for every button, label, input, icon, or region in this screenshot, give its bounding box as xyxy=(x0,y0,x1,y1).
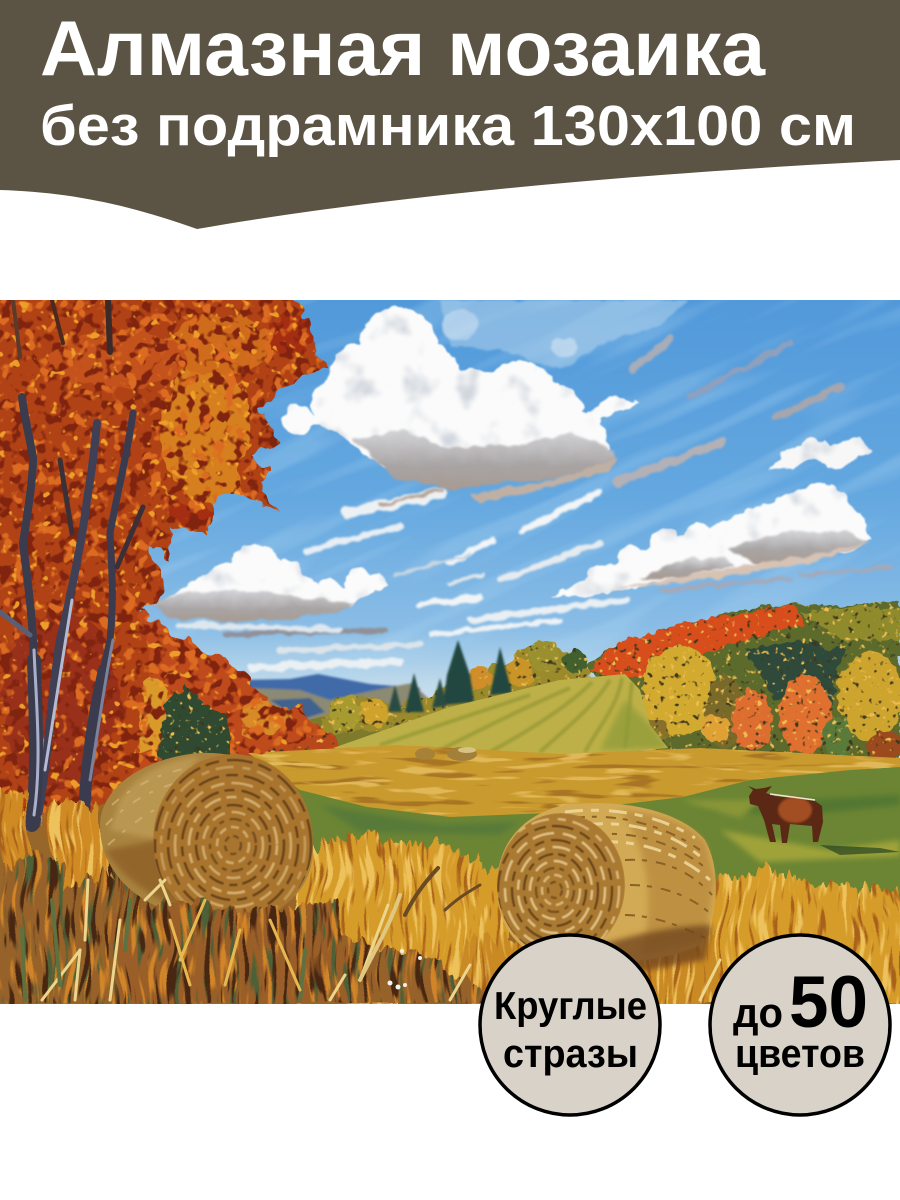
sky xyxy=(138,300,900,758)
badge: up to 50 colours xyxy=(710,935,890,1115)
right hay bale xyxy=(491,803,716,975)
left bale spiral face xyxy=(153,754,313,930)
badge: up to 50 colours: до xyxy=(733,989,783,1036)
green meadow xyxy=(296,767,900,898)
distant hills xyxy=(250,672,430,720)
header banner xyxy=(0,0,900,229)
distant bales xyxy=(415,747,477,761)
horizon shrub band xyxy=(236,706,402,755)
foreground base colour xyxy=(0,780,900,1004)
grass blades xyxy=(22,868,815,1000)
subtitle: без подрамника 130х100 см xyxy=(40,94,856,158)
background tree line xyxy=(315,639,592,735)
small right cloud xyxy=(768,437,870,470)
cow xyxy=(748,786,900,855)
golden grass right xyxy=(295,829,900,1004)
left hay bale xyxy=(100,753,313,930)
mown hill xyxy=(333,674,668,758)
painting: autumn landscape xyxy=(0,300,900,1004)
right forest xyxy=(585,602,900,768)
left cloud xyxy=(150,544,388,622)
red shrubs at field edge xyxy=(236,732,339,758)
meadow patches xyxy=(320,795,900,862)
large cloud xyxy=(283,307,640,503)
golden grass at tree base xyxy=(0,790,115,885)
pine trees xyxy=(388,640,512,712)
sky wisps xyxy=(180,338,890,668)
lower autumn trees at left xyxy=(131,608,329,776)
dark shrub xyxy=(158,685,232,760)
badge: round rhinestones: стразы xyxy=(503,1032,638,1076)
grass over left bale base xyxy=(113,896,341,1004)
badge: up to 50 colours: цветов xyxy=(735,1032,865,1076)
autumn tree foliage xyxy=(0,280,325,830)
golden stubble field xyxy=(248,745,900,817)
lower grass band xyxy=(459,926,720,1004)
right cloud xyxy=(552,484,872,597)
badge: up to 50 colours: 50 xyxy=(789,962,868,1043)
small white flowers xyxy=(388,949,422,990)
badge: round rhinestones: Круглые xyxy=(494,985,647,1028)
title: Алмазная мозаика xyxy=(40,4,766,92)
upper translucent cloud wash xyxy=(440,300,690,370)
badge: round rhinestones xyxy=(480,935,660,1115)
tree trunks xyxy=(0,300,143,825)
right bale spiral face xyxy=(497,813,625,945)
left foreground grass xyxy=(0,849,484,1004)
